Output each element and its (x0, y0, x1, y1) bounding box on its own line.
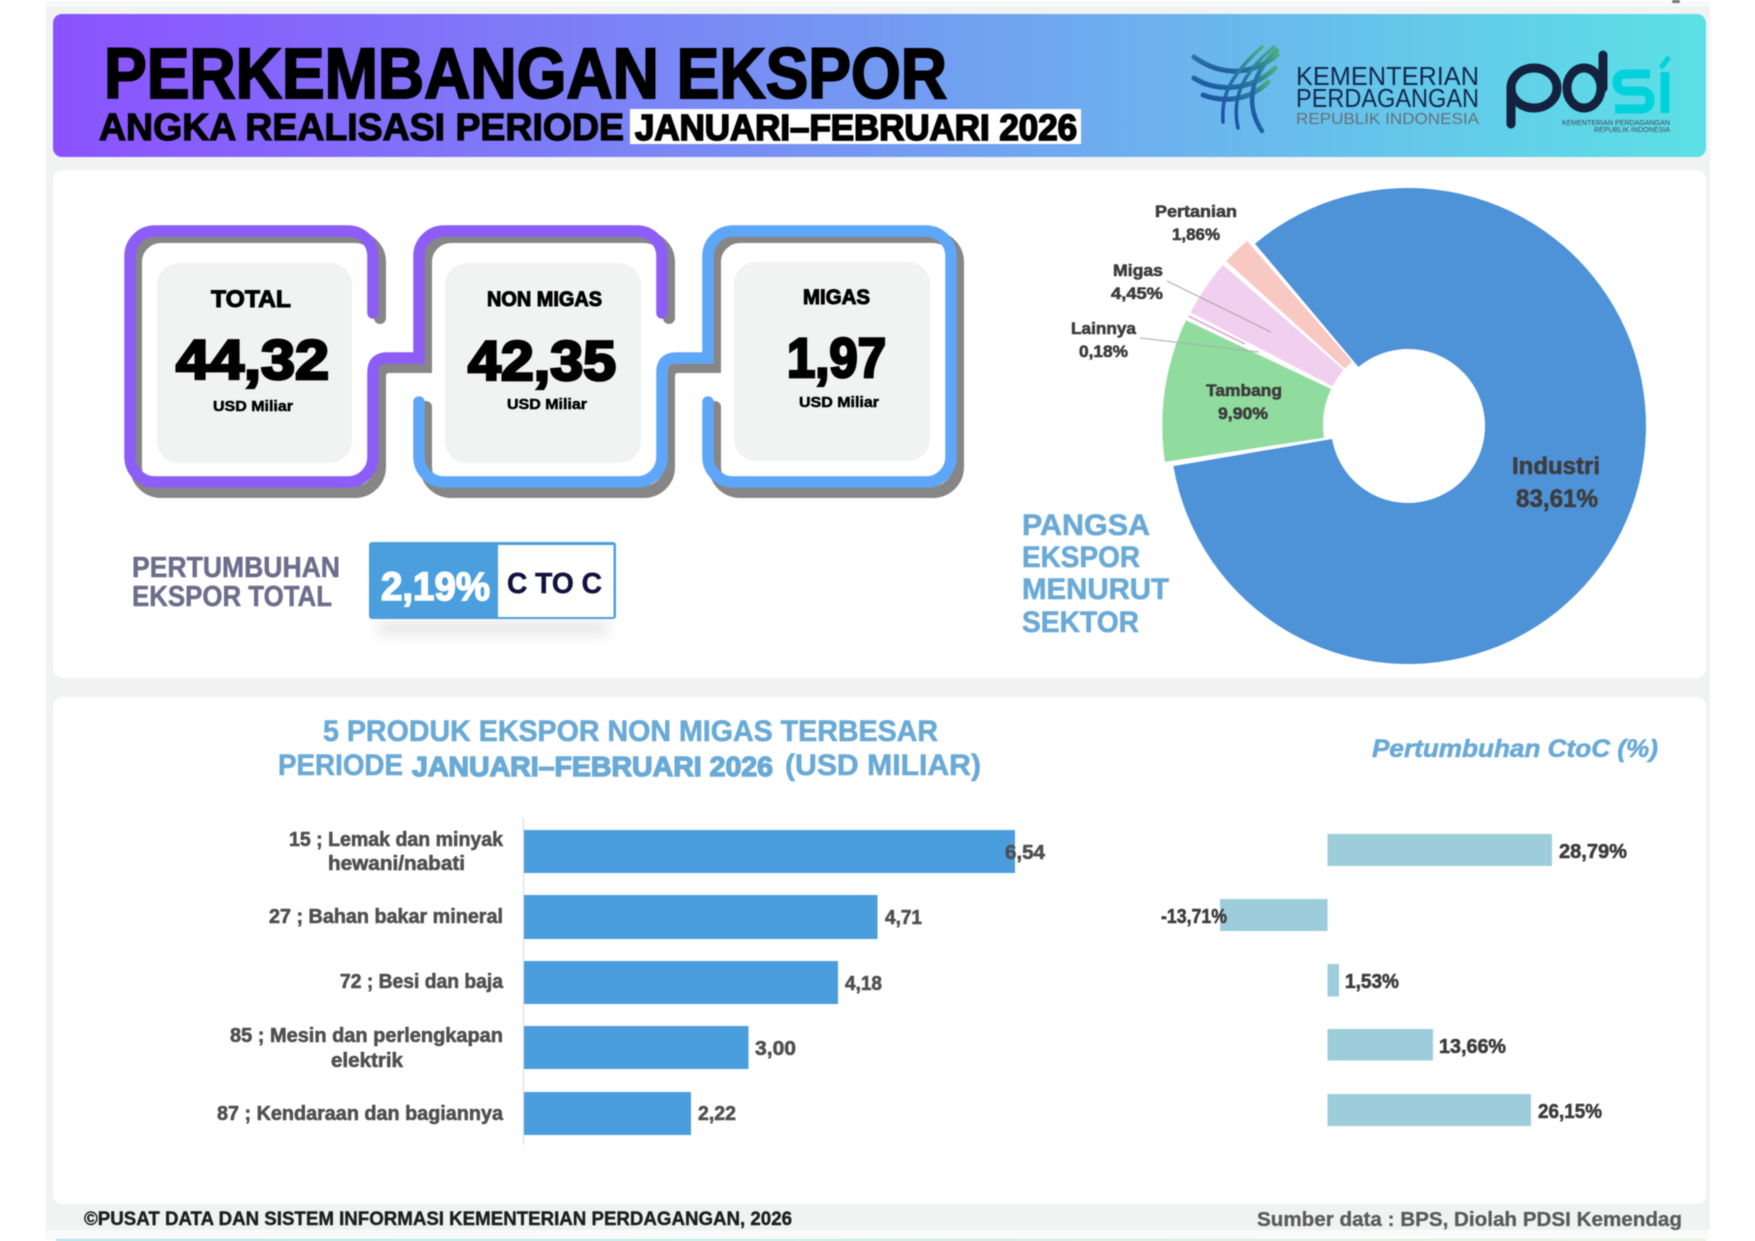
row: kendaraan dan bagiannya: 87 ; Kendaraan dan bagiannya (217, 1103, 504, 1125)
label: industri: Industri (1512, 453, 1600, 480)
subtitle: ANGKA REALISASI PERIODE (99, 107, 624, 149)
label: tambang: 9,90% (1218, 404, 1268, 423)
heading: pangsa ekspor menurut sektor: PANGSA (1022, 509, 1150, 542)
card: migas: 1,97 (787, 326, 886, 389)
row: bahan bakar mineral: 4,71 (885, 907, 922, 929)
row: bahan bakar mineral (269, 895, 922, 939)
slice: migas (1191, 265, 1344, 386)
slice: industri (1173, 188, 1646, 664)
row: mesin dan perlengkapan: 85 ; Mesin dan perlengkapan (230, 1025, 503, 1047)
growth: 26,15 (1328, 1094, 1602, 1126)
row: besi dan baja: 72 ; Besi dan baja (340, 971, 504, 993)
chart: sector share donut (1071, 188, 1646, 664)
footer copyright: ©PUSAT DATA DAN SISTEM INFORMASI KEMENTERIAN PERDAGANGAN, 2026 (84, 1209, 792, 1230)
ministry name: PERDAGANGAN (1296, 83, 1479, 113)
growth label: EKSPOR TOTAL (132, 581, 332, 613)
card: migas: MIGAS (803, 286, 870, 309)
row: lemak dan minyak: 6,54 (1005, 842, 1046, 864)
slice: tambang (1162, 320, 1331, 462)
logo: pdsi: KEMENTERIAN PERDAGANGAN (1562, 120, 1670, 127)
period highlight: JANUARI–FEBRUARI 2026 (635, 107, 1077, 148)
row: kendaraan dan bagiannya (217, 1092, 736, 1135)
card: total: TOTAL (211, 286, 291, 313)
growth: 13,66 (1328, 1029, 1506, 1060)
row: mesin dan perlengkapan: 3,00 (755, 1038, 796, 1060)
growth: -13,71: -13,71% (1161, 906, 1227, 928)
row: lemak dan minyak: 15 ; Lemak dan minyak (289, 829, 504, 851)
ministry name (1296, 61, 1479, 128)
growth: 13,66: 13,66% (1439, 1036, 1506, 1058)
leader lines (1140, 281, 1271, 352)
header banner (53, 14, 1706, 157)
row: kendaraan dan bagiannya: 2,22 (698, 1103, 736, 1125)
card: migas: USD Miliar (799, 394, 879, 411)
growth badge (369, 542, 616, 634)
card: non migas: NON MIGAS (487, 288, 602, 311)
label: lainnya: 0,18% (1079, 343, 1128, 361)
heading: pangsa ekspor menurut sektor (1022, 509, 1169, 639)
heading: pangsa ekspor menurut sektor: SEKTOR (1022, 606, 1139, 639)
row: mesin dan perlengkapan (230, 1025, 796, 1072)
label: lainnya: Lainnya (1071, 320, 1137, 338)
row: bahan bakar mineral: 27 ; Bahan bakar mineral (269, 906, 503, 928)
logo: pdsi (1511, 55, 1670, 134)
label: tambang: Tambang (1206, 381, 1282, 400)
panel: kpi cards (130, 231, 958, 492)
ministry name: KEMENTERIAN (1296, 61, 1479, 91)
growth: -13,71 (1161, 899, 1328, 931)
heading: top five products: 5 PRODUK EKSPOR NON MIGAS TERBESAR (323, 715, 938, 748)
card: non migas (445, 263, 641, 463)
growth label: PERTUMBUHAN (132, 552, 340, 584)
bar chart: export value (217, 818, 1046, 1145)
row: besi dan baja: 4,18 (845, 973, 882, 995)
icon: ministry emblem (1194, 47, 1277, 131)
label: industri (1512, 453, 1600, 513)
label: migas: 4,45% (1111, 285, 1163, 303)
growth: 26,15: 26,15% (1538, 1101, 1602, 1123)
row: mesin dan perlengkapan: elektrik (331, 1050, 404, 1072)
heading: top five products (278, 715, 981, 782)
bar chart: growth (1161, 834, 1627, 1126)
label: tambang (1206, 381, 1282, 423)
logo: pdsi: REPUBLIK INDONESIA (1594, 127, 1670, 134)
label: pertanian: 1,86% (1172, 226, 1220, 244)
growth: 28,79 (1328, 834, 1627, 866)
slice: lainnya (1189, 316, 1245, 344)
label: migas (1111, 262, 1163, 303)
card: total: 44,32 (176, 328, 329, 391)
panel: top summary (53, 170, 1706, 678)
footer source: Sumber data : BPS, Diolah PDSI Kemendag (1257, 1209, 1682, 1231)
growth label (132, 552, 340, 613)
label: industri: 83,61% (1516, 485, 1598, 513)
label: pertanian: Pertanian (1155, 203, 1237, 221)
growth: 1,53 (1328, 964, 1399, 996)
heading: top five products: PERIODE (278, 749, 403, 782)
card: migas (734, 262, 930, 461)
card: total: USD Miliar (213, 398, 293, 415)
connected card frames (130, 231, 958, 492)
heading: top five products: JANUARI–FEBRUARI 2026 (412, 751, 773, 782)
growth badge: 2,19% (381, 565, 490, 609)
label: lainnya (1071, 320, 1137, 361)
growth: 1,53: 1,53% (1345, 971, 1399, 993)
heading: pangsa ekspor menurut sektor: MENURUT (1022, 573, 1169, 606)
row: lemak dan minyak: hewani/nabati (328, 853, 465, 875)
growth: 28,79: 28,79% (1559, 841, 1627, 863)
growth badge: C TO C (507, 568, 602, 600)
heading: top five products: (USD MILIAR) (785, 749, 981, 782)
slice: pertanian (1226, 241, 1352, 369)
card: non migas: 42,35 (468, 329, 616, 392)
row: besi dan baja (340, 961, 882, 1004)
row: lemak dan minyak (289, 829, 1046, 875)
label: pertanian (1155, 203, 1237, 244)
heading: pangsa ekspor menurut sektor: EKSPOR (1022, 541, 1140, 574)
heading: growth ctoc: Pertumbuhan CtoC (%) (1372, 735, 1658, 763)
panel: top products (53, 697, 1706, 1204)
card: total (157, 263, 352, 463)
title: PERKEMBANGAN EKSPOR (104, 35, 947, 114)
ministry name: REPUBLIK INDONESIA (1296, 111, 1479, 128)
card: non migas: USD Miliar (507, 396, 587, 413)
label: migas: Migas (1113, 262, 1163, 280)
